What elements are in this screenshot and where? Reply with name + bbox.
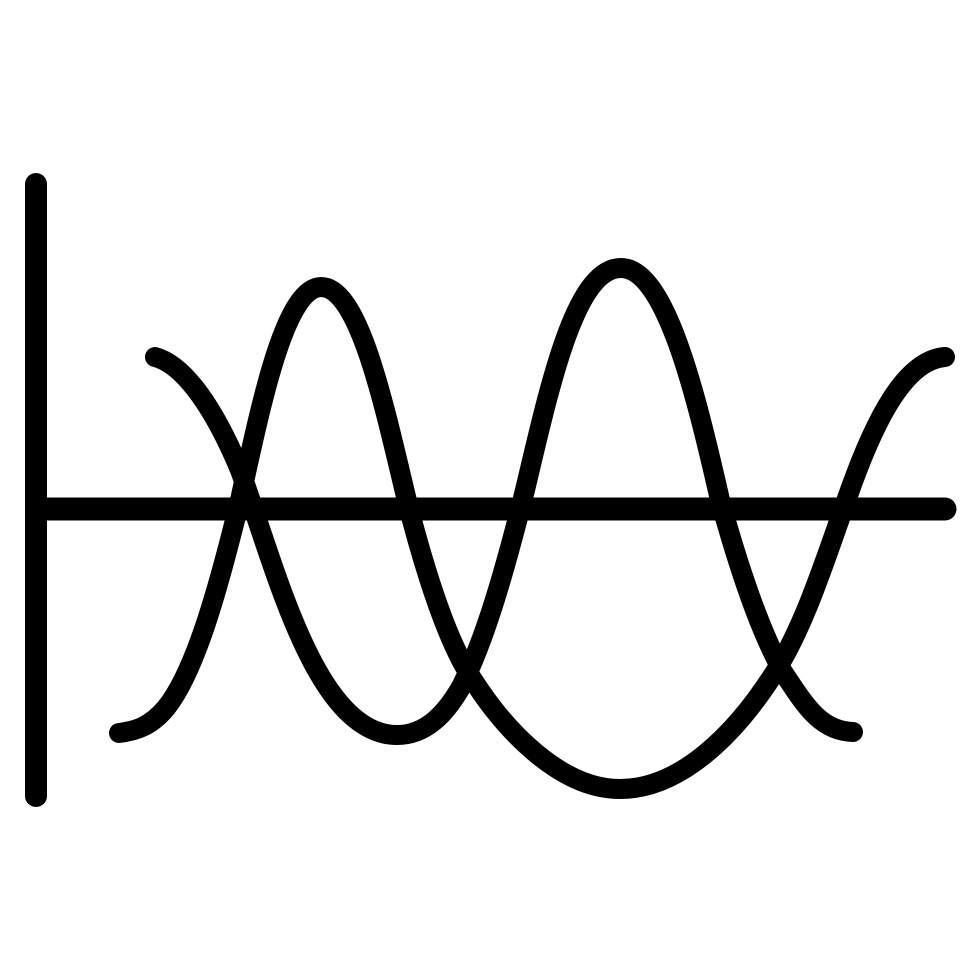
wave 2: starts high left, dips, peaks, ends low right — [155, 268, 853, 735]
wave 1: starts low left, peaks twice, ends high right — [119, 287, 945, 789]
vertical axis — [25, 184, 47, 796]
horizontal axis — [40, 498, 945, 520]
